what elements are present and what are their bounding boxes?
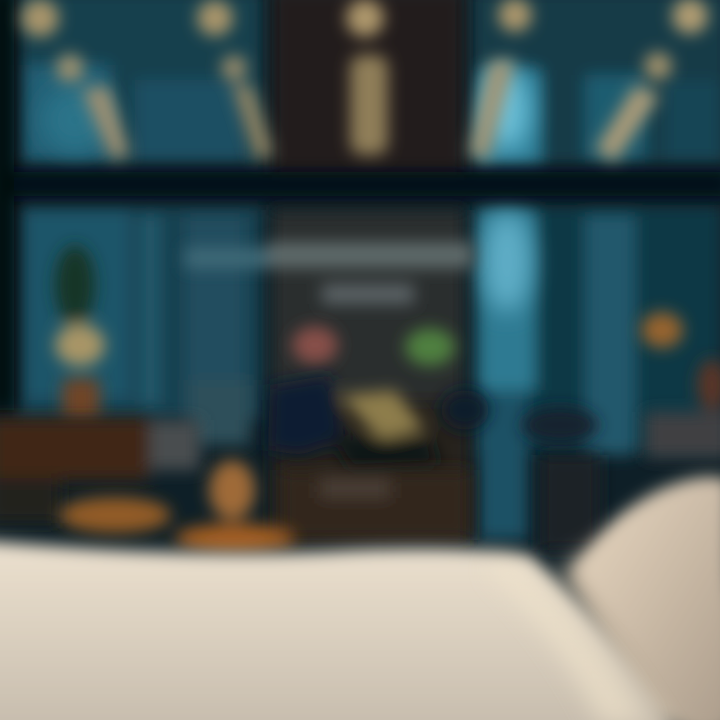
panel: center dark column [272,0,470,540]
highlight: bright window reflections [41,70,531,312]
furniture: wooden sideboard [0,418,470,540]
bed: sheet highlight fold [490,555,650,720]
icon: red and green blurred indicators [292,326,455,366]
furniture: dark seated figures and table [268,375,598,470]
text block: blurred sign on center wall [185,242,473,304]
frame: window mullions [0,0,720,410]
plant: potted tree with lamp [55,245,105,420]
decoration: orange items on bed edge [59,460,295,552]
pillow: right cushion [575,476,720,720]
panel: right window [470,0,720,540]
decoration: right side lamp and wall items [540,312,720,550]
bed: tan underlay between sheets and cushion [560,520,720,720]
panel: left window [18,0,263,445]
bed: white sheets [0,540,680,720]
lights: ceiling lamps and streaks [21,0,708,162]
